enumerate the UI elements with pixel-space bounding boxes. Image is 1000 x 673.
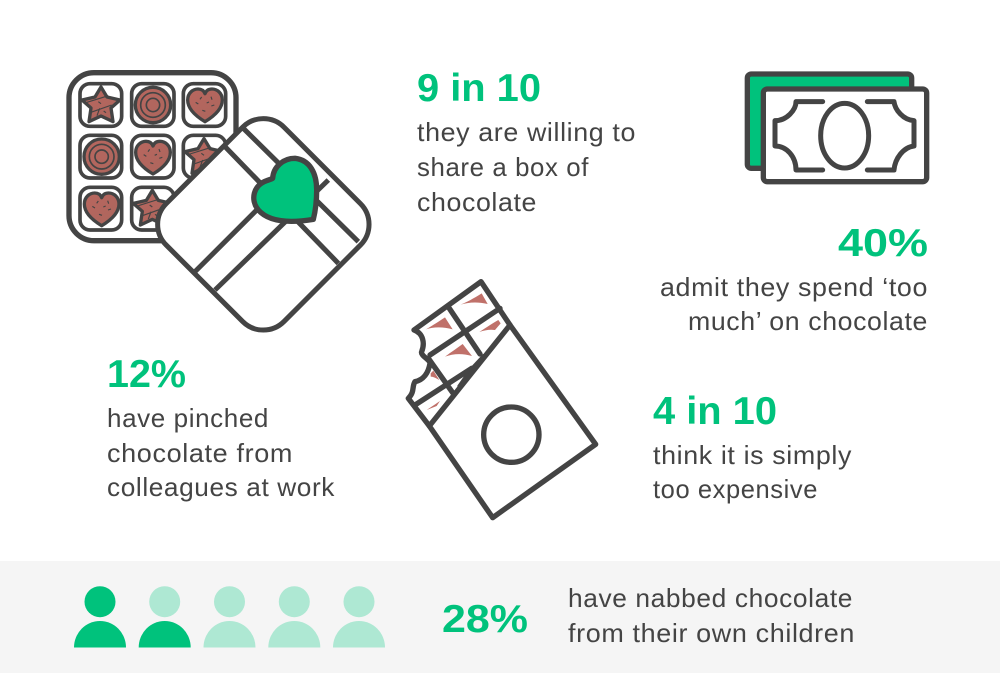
icon: box of chocolates with lid xyxy=(69,73,381,342)
stat: 28%: 28% xyxy=(442,598,528,641)
stat value: 4 in 10 xyxy=(653,390,777,433)
stat description xyxy=(660,272,928,336)
stat description xyxy=(653,440,852,504)
stat description: chocolate xyxy=(417,187,537,217)
stat description: 28%: from their own children xyxy=(568,618,855,648)
stat value: 12% xyxy=(107,353,186,396)
stat description xyxy=(107,403,335,502)
chocolate pieces xyxy=(408,282,508,425)
icon: bitten chocolate bar xyxy=(408,282,596,518)
chocolate tray xyxy=(69,73,236,241)
person 1 highlighted xyxy=(74,586,126,648)
stat description: think it is simply xyxy=(653,440,852,470)
stat value: 40% xyxy=(838,222,928,265)
stat description: too expensive xyxy=(653,474,818,504)
stat description: much’ on chocolate xyxy=(688,306,928,336)
stat description: share a box of xyxy=(417,152,589,182)
stat description: colleagues at work xyxy=(107,472,335,502)
stat description: admit they spend ‘too xyxy=(660,272,928,302)
stat value: 9 in 10 xyxy=(417,67,541,110)
stat description: chocolate from xyxy=(107,438,293,468)
stat: 4 in 10 xyxy=(653,390,852,504)
stat description xyxy=(417,117,636,217)
back note xyxy=(747,74,912,168)
wrapper and outline xyxy=(408,282,596,518)
icon: green heart xyxy=(254,158,317,221)
stat: 12% xyxy=(107,353,335,502)
bottom band xyxy=(0,561,1000,673)
icon row: people, two of five highlighted xyxy=(74,586,385,648)
stat description: 28% xyxy=(568,583,855,648)
stat: 9 in 10 xyxy=(417,67,636,217)
stat description: have pinched xyxy=(107,403,269,433)
icon: banknotes xyxy=(747,74,927,182)
front note xyxy=(763,89,927,182)
stat description: 28%: have nabbed chocolate xyxy=(568,583,853,613)
box lid xyxy=(145,106,381,342)
stat description: they are willing to xyxy=(417,117,636,147)
stat: 40% xyxy=(660,222,928,336)
person 3 xyxy=(204,586,256,648)
person 2 highlighted xyxy=(139,586,191,648)
person 4 xyxy=(268,586,320,648)
person 5 xyxy=(333,586,385,648)
